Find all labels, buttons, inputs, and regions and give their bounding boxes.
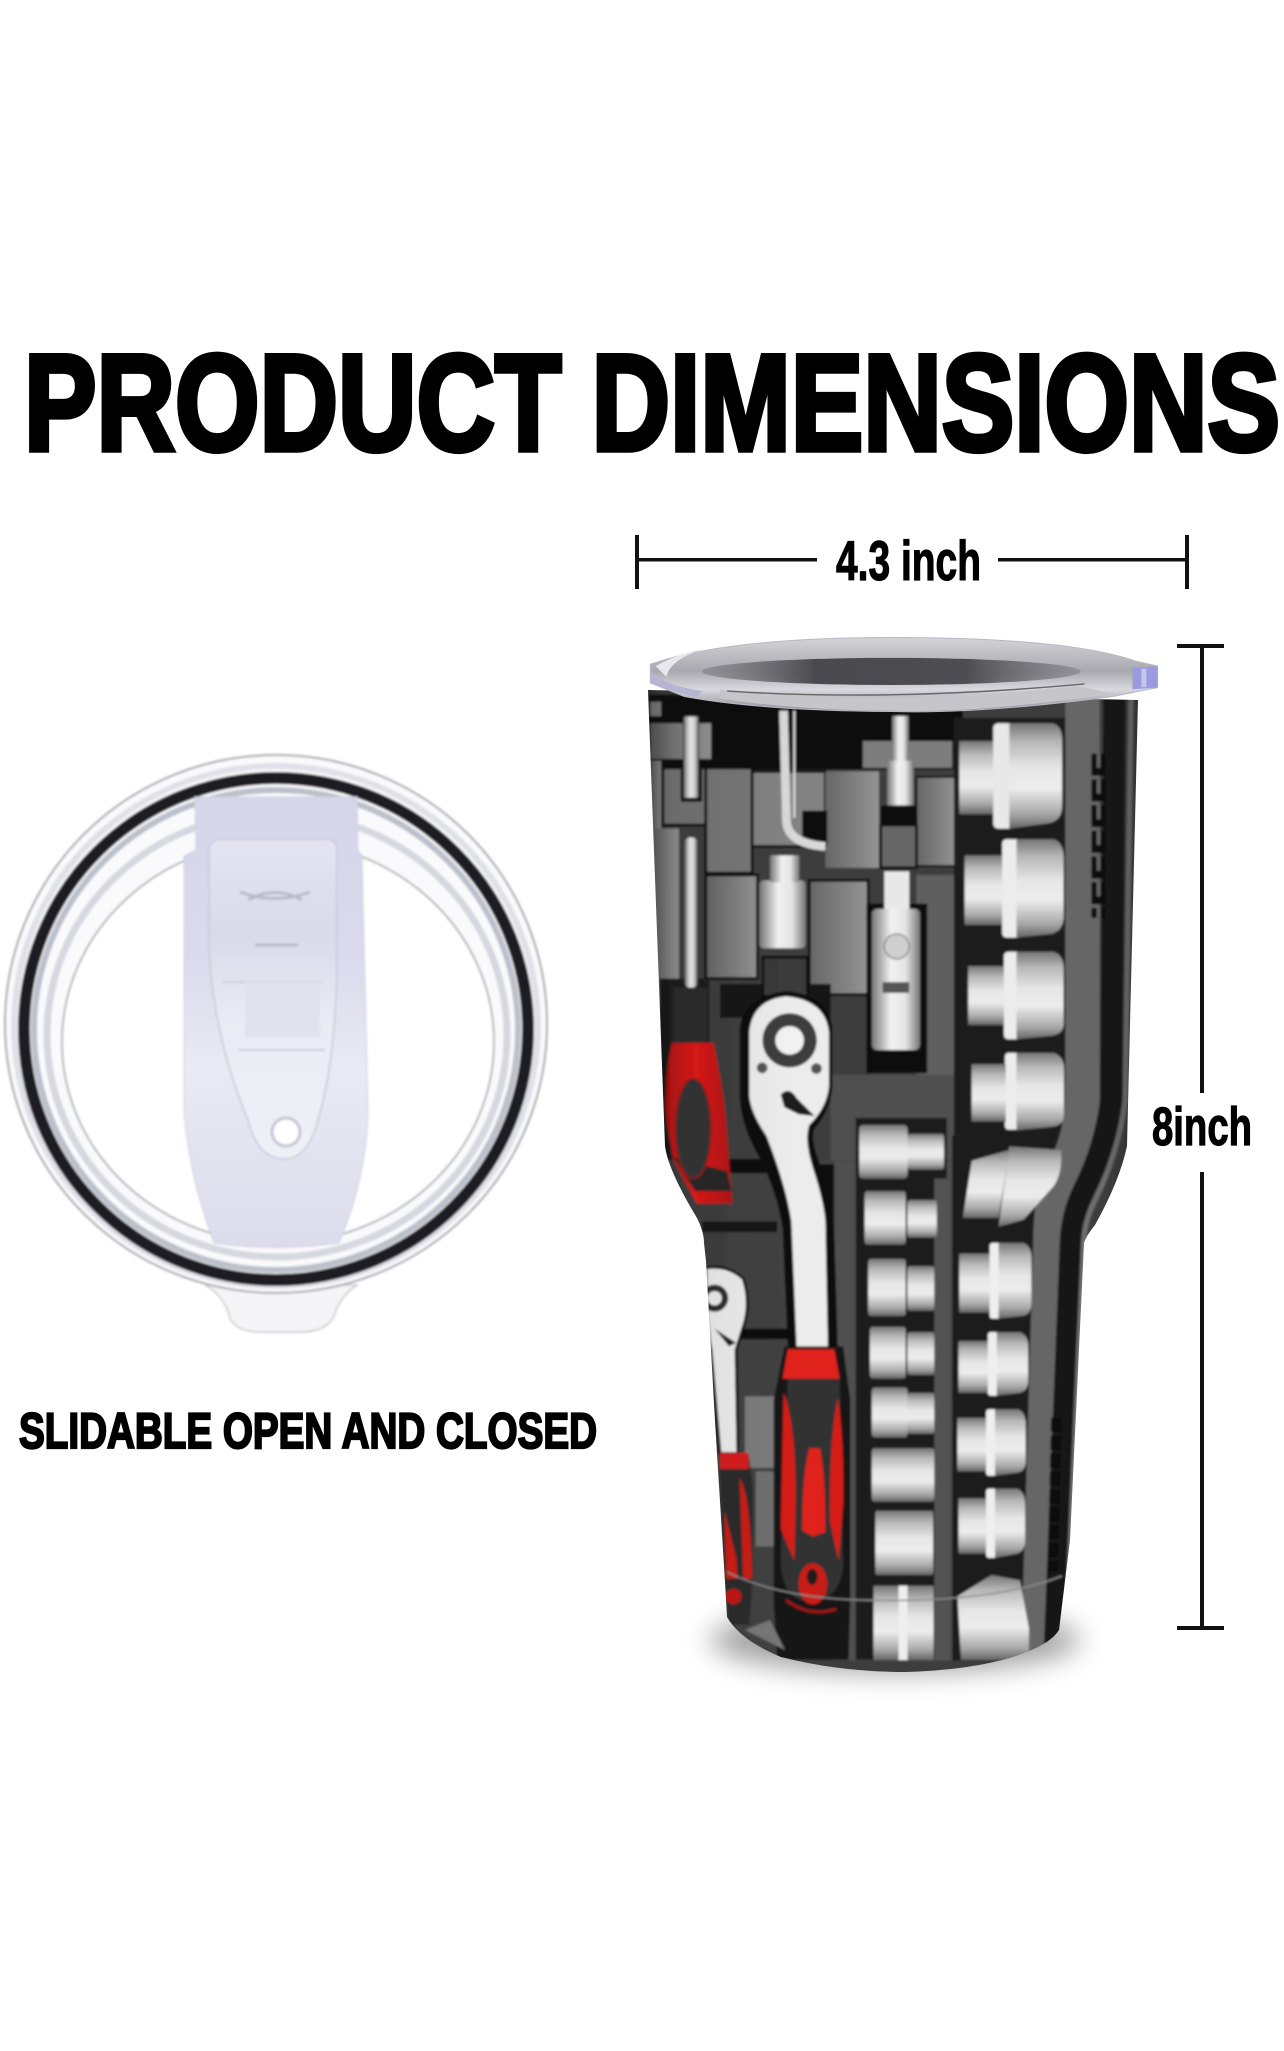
small ratchet: [706, 1267, 747, 1454]
tumbler shadow: [710, 1608, 1080, 1672]
lid tab right: [1132, 666, 1157, 689]
slanted socket: [963, 1150, 1009, 1218]
extension bar: [685, 837, 697, 987]
tumbler clear lid: [650, 637, 1157, 712]
lower tray print: [701, 671, 1131, 1671]
small ratchet grip: [719, 1454, 753, 1625]
main ratchet print: [740, 991, 838, 1350]
small socket: [759, 880, 806, 948]
large sockets column: [954, 718, 1066, 1160]
top large sockets overlap: [972, 1064, 1006, 1121]
width label: 4.3 inch: [836, 529, 981, 592]
slider: [184, 797, 368, 1248]
main handle print: [774, 1346, 850, 1660]
lid opening: [702, 658, 1081, 685]
allen key: [784, 711, 825, 846]
width dimension arrow: 4.3 inch: [635, 529, 1189, 592]
slider inner recess: [209, 839, 337, 1159]
height dimension arrow: 8 inch: [1152, 644, 1252, 1630]
universal joint: [866, 904, 927, 1073]
tumbler body with socket set print: [640, 671, 1150, 1680]
socket column B: [959, 1254, 991, 1312]
caption under lid: SLIDABLE OPEN AND CLOSED: [19, 1403, 597, 1459]
bit holder: [684, 716, 699, 798]
upper tray print: [649, 695, 1066, 1160]
drink hole: [272, 1118, 300, 1146]
lid tab: [205, 1285, 357, 1332]
black gasket ring: [24, 778, 528, 1280]
cylinder shading: [648, 690, 1138, 1600]
socket column A: [859, 1125, 907, 1179]
bottom seam: [727, 1572, 1062, 1600]
slidable lid, top view: [5, 755, 547, 1332]
base wedge: [745, 1620, 785, 1650]
side strips following the tumbler profile: [1038, 671, 1082, 1671]
chain details: [1090, 752, 1106, 919]
screwdriver print: [666, 987, 732, 1204]
